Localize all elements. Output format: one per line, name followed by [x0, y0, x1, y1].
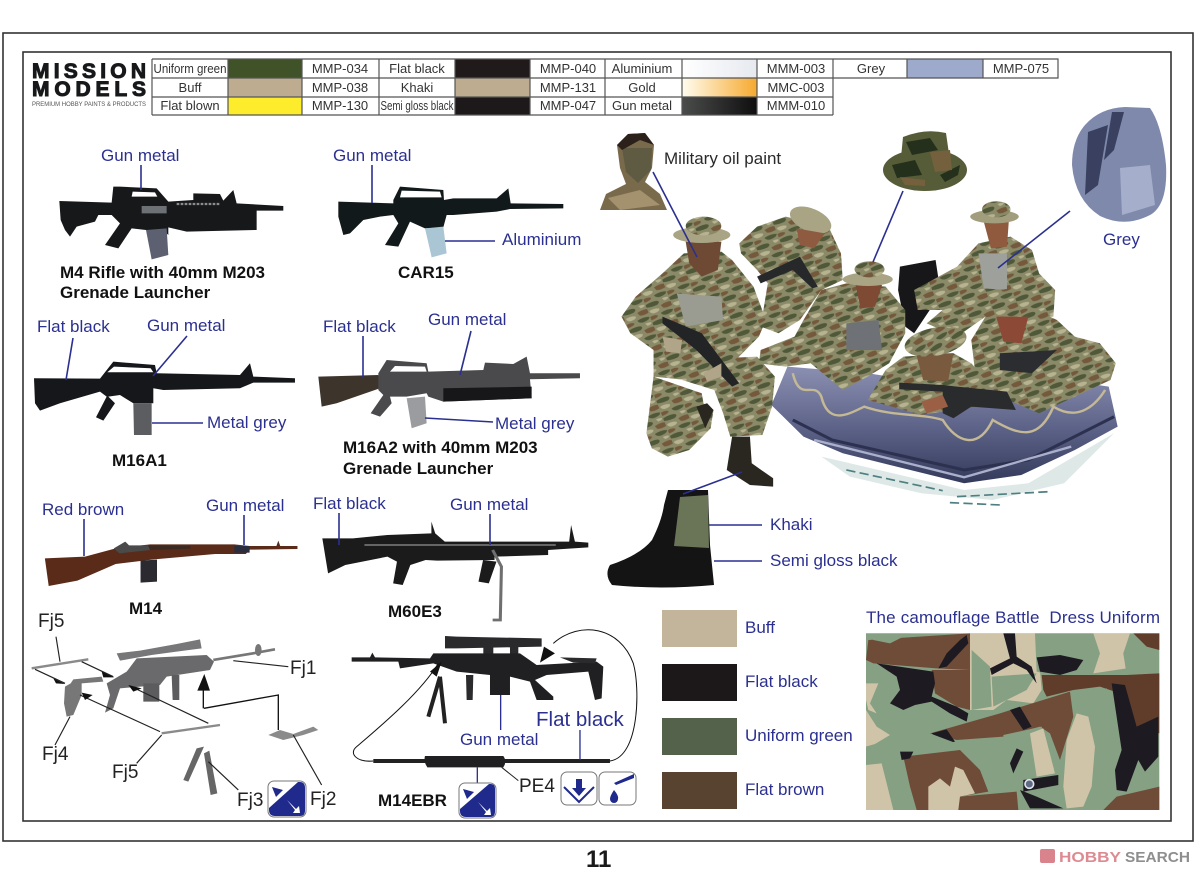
paint colour table: MMP-040 [540, 61, 596, 76]
assembly diagram: M14EBR with sling [352, 630, 637, 818]
paint colour table: Uniform green [154, 61, 226, 76]
rifle: M16A2 with M203: Gun metal [428, 310, 506, 329]
machine gun: M60E3: M60E3 [388, 602, 442, 621]
soldier kneeling, foreground [621, 217, 775, 487]
assembly diagram: parts Fj1 to Fj5: Fj5 [38, 611, 64, 632]
paint colour table: MMP-130 [312, 98, 368, 113]
camouflage colour key: Buff [745, 618, 775, 637]
leader line to grey poncho [998, 211, 1070, 268]
rifle: CAR15: Aluminium [502, 230, 581, 249]
rifle: M14: M14 [129, 599, 163, 618]
assembly diagram: parts Fj1 to Fj5: Fj2 [310, 789, 336, 810]
camouflage colour key: Uniform green [745, 726, 853, 745]
icon: assembly symbol [459, 783, 496, 818]
assembly diagram: parts Fj1 to Fj5 [32, 611, 336, 817]
paint colour table: Gun metal [612, 98, 672, 113]
paint colour table: Aluminium [612, 61, 672, 76]
assembly diagram: M14EBR with sling: Flat black [536, 708, 624, 731]
leader line to hat [873, 191, 903, 262]
paint colour table: Buff [179, 80, 202, 95]
detail: jungle boot with labels [607, 472, 898, 588]
rifle: M16A2 with M203: Grenade Launcher [343, 459, 494, 478]
water under boat [821, 433, 1114, 505]
paint colour table: MMC-003 [767, 80, 825, 95]
assembly diagram: M14EBR with sling: PE4 [519, 776, 555, 797]
rifle: M16A1 [34, 316, 295, 470]
photo: woodland camouflage fabric [866, 633, 1159, 810]
icon: assembly symbol [268, 781, 306, 817]
assembly diagram: M14EBR with sling: M14EBR [378, 791, 447, 810]
paint colour table: Flat black [389, 61, 445, 76]
logo: Mission Models: MODELS [32, 78, 146, 101]
rifle: M16A2 with M203: Metal grey [495, 414, 575, 433]
rifle: M14 [42, 496, 297, 618]
watermark: Hobby Search: HOBBY [1059, 849, 1121, 866]
machine gun: M60E3: Flat black [313, 494, 386, 513]
paint colour table [152, 59, 1058, 115]
watermark: Hobby Search: SEARCH [1125, 849, 1190, 866]
detail: boonie hat [883, 131, 967, 191]
outboard motor [898, 260, 939, 333]
paint colour table: Gold [628, 80, 656, 95]
detail: grey poncho with label [1072, 107, 1166, 249]
paint colour table: MMP-034 [312, 61, 368, 76]
detail: jungle boot with labels: Khaki [770, 515, 813, 534]
rifle: M16A2 with M203: Flat black [323, 317, 396, 336]
assembly diagram: parts Fj1 to Fj5: Fj5 [112, 762, 138, 783]
paint colour table: MMP-075 [993, 61, 1049, 76]
detail: face paint portrait [600, 133, 781, 210]
watermark: Hobby Search [1040, 849, 1190, 866]
logo: Mission Models: MISSION [32, 60, 146, 83]
machine gun: M60E3: Gun metal [450, 495, 528, 514]
paint colour table: MMP-047 [540, 98, 596, 113]
rifle: CAR15 [333, 146, 581, 282]
inflatable boat [771, 367, 1118, 483]
paint colour table: Semi gloss black [380, 98, 454, 113]
illustration: soldiers on inflatable boat [621, 172, 1118, 505]
boat grab ropes [793, 373, 1105, 440]
rifle: M16A1: Flat black [37, 317, 110, 336]
paint colour table: Grey [857, 61, 886, 76]
paint colour table: MMP-038 [312, 80, 368, 95]
page number: 11 [586, 846, 611, 873]
heading: camouflage uniform: The camouflage Battle Dress Uniform [866, 608, 1160, 627]
soldier front prone with rifle [868, 322, 1016, 418]
soldier behind, rear left [739, 201, 843, 333]
paint colour table: MMP-131 [540, 80, 596, 95]
soldier centre [759, 261, 905, 390]
rifle: M16A1: Gun metal [147, 316, 225, 335]
camouflage colour key [662, 610, 853, 809]
rifle: M4 with M203: M4 Rifle with 40mm M203 [60, 263, 265, 282]
assembly diagram: parts Fj1 to Fj5: Fj1 [290, 658, 316, 679]
logo: Mission Models: PREMIUM HOBBY PAINTS & PRODUCTS [32, 102, 146, 108]
rifle: CAR15: Gun metal [333, 146, 411, 165]
paint colour table: MMM-010 [767, 98, 825, 113]
paint colour table: Khaki [401, 80, 433, 95]
logo: Mission Models [32, 60, 146, 108]
detail: jungle boot with labels: Semi gloss black [770, 551, 898, 570]
camouflage colour key: Flat brown [745, 780, 824, 799]
rifle: M4 with M203: Gun metal [101, 146, 179, 165]
rifle: M16A1: M16A1 [112, 451, 167, 470]
assembly diagram: M14EBR with sling: Gun metal [460, 730, 538, 749]
rifle: M4 with M203 [59, 146, 283, 302]
rifle: M16A2 with M203: M16A2 with 40mm M203 [343, 438, 538, 457]
rifle: M16A1: Metal grey [207, 413, 287, 432]
paint colour table: Flat blown [160, 98, 220, 113]
icon: fold direction symbol [561, 772, 597, 805]
soldier front right [971, 288, 1116, 413]
detail: face paint portrait: Military oil paint [664, 149, 781, 168]
rifle: M14: Gun metal [206, 496, 284, 515]
icon: apply glue symbol [599, 772, 636, 805]
leader line to face paint [653, 172, 697, 257]
rifle: CAR15: CAR15 [398, 263, 454, 282]
detail: grey poncho with label: Grey [1103, 230, 1140, 249]
soldier standing, rear right [914, 201, 1055, 337]
paint colour table: MMM-003 [767, 61, 825, 76]
assembly diagram: parts Fj1 to Fj5: Fj4 [42, 744, 69, 765]
rifle: M14: Red brown [42, 500, 124, 519]
assembly diagram: parts Fj1 to Fj5: Fj3 [237, 790, 263, 811]
rifle: M16A2 with M203 [318, 310, 580, 478]
rifle: M4 with M203: Grenade Launcher [60, 283, 211, 302]
machine gun: M60E3 [313, 494, 588, 621]
camouflage colour key: Flat black [745, 672, 818, 691]
